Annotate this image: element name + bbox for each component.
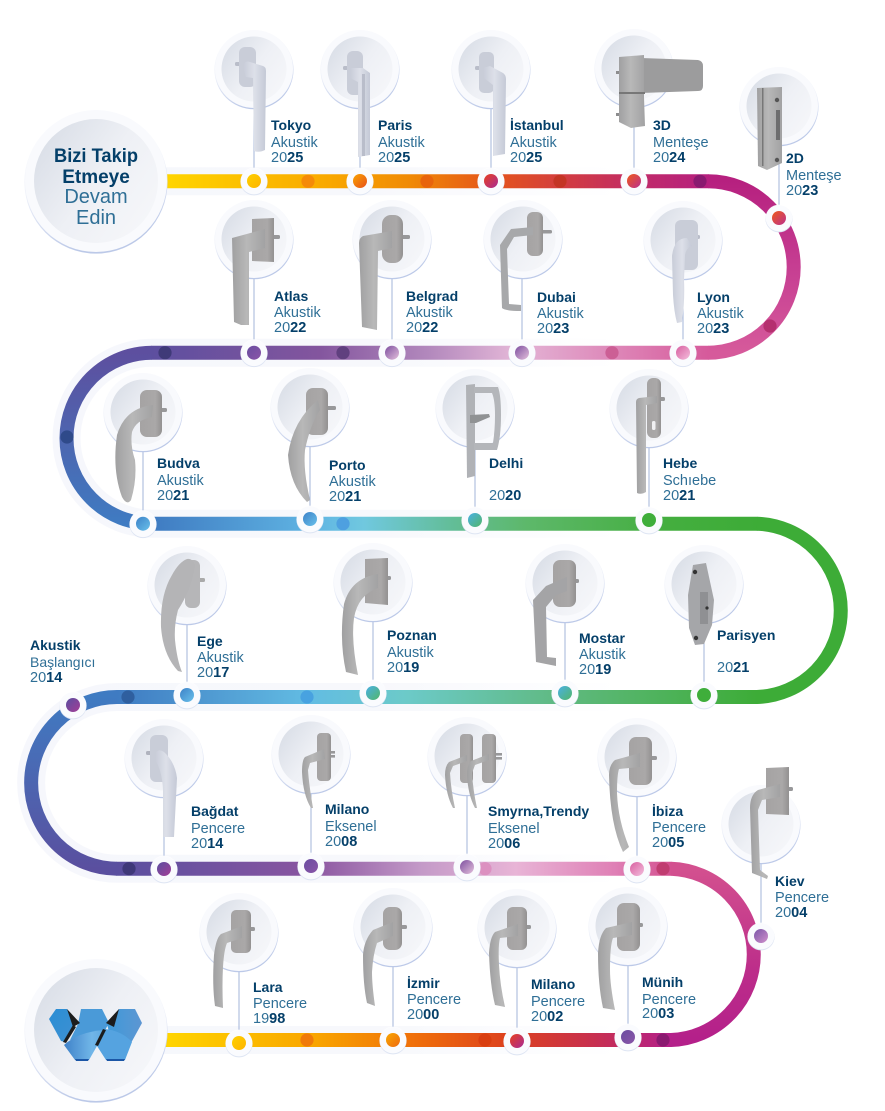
icon: Bağdat handle [146,735,177,837]
timeline track [31,181,841,1040]
label: Smyrna, Trendy: Smyrna,Trendy [488,803,589,819]
label: Poznan: Akustik [387,645,434,661]
label: Tokyo: Akustik [271,135,318,151]
label: Akustik Başlangıcı: 2014 [30,670,62,686]
icon: Budva handle [115,390,167,502]
label: Ege [197,633,244,681]
label: Paris: 2025 [378,150,410,166]
label: Porto: 2021 [329,489,361,505]
icon: Lyon handle [672,220,700,323]
icon: Ege handle [161,559,205,672]
label: Akustik Başlangıcı: Başlangıcı [30,654,95,670]
label: İbiza: Pencere [652,820,706,836]
product: Mostar [525,544,626,707]
label: Parisyen: Parisyen [717,627,775,643]
label: Lara [253,979,307,1027]
product: Kiev [721,767,829,950]
label: 3D: Menteşe [653,135,709,151]
label: Lyon: 2023 [697,321,729,337]
label: Parisyen: 2021 [717,660,749,676]
label: 3D: 3D [653,117,671,133]
label: 2D: 2D [786,150,804,166]
label: Delhi: Delhi [489,455,523,471]
icon: 3D hinge [616,55,703,128]
label: İstanbul [510,117,564,166]
label: Parisyen [717,627,775,676]
label: İstanbul: İstanbul [510,117,564,133]
label: 2D: 2023 [786,183,818,199]
label: Lara: Pencere [253,996,307,1012]
icon: İstanbul handle [475,52,506,156]
product: Hebe [609,369,716,534]
label: Poznan: Poznan [387,627,437,643]
product: Delhi [435,369,523,534]
label: Belgrad [406,288,458,336]
product: 3D [594,29,709,195]
label: Lyon [697,289,744,337]
label: İzmir [407,975,461,1023]
start badge: Bizi Takip Etmeye Devam Edin: Etmeye [62,167,130,188]
product: Münih [588,887,696,1051]
label: İbiza: İbiza [652,803,683,819]
label: Paris: Paris [378,117,412,133]
label: Akustik Başlangıcı: Akustik [30,637,81,653]
label: Milano Pencere: Pencere [531,994,585,1010]
label: Belgrad: 2022 [406,320,438,336]
label: Kiev: Kiev [775,873,805,889]
label: Atlas [274,288,321,336]
start badge: Bizi Takip Etmeye Devam Edin: Devam [64,186,128,208]
product: Tokyo [214,30,318,195]
label: İstanbul: 2025 [510,150,542,166]
logo badge [24,959,168,1103]
label: Kiev: Pencere [775,890,829,906]
start badge: Bizi Takip Etmeye Devam Edin [24,110,168,254]
label: Milano Eksenel [325,801,377,850]
label: Budva: Akustik [157,473,204,489]
label: Dubai: Akustik [537,306,584,322]
product: Lara [199,893,307,1057]
label: Münih: Münih [642,974,683,990]
label: Lyon: Lyon [697,289,730,305]
label: Ege: Akustik [197,650,244,666]
label: Bağdat: Bağdat [191,803,239,819]
label: Hebe: Hebe [663,455,697,471]
label: Tokyo: Tokyo [271,117,311,133]
icon: company logo [49,1009,142,1061]
product: Smyrna, Trendy [427,717,589,881]
label: Belgrad: Belgrad [406,288,458,304]
label: Porto: Akustik [329,474,376,490]
icon: Mostar handle [533,560,579,666]
label: Münih: 2003 [642,1006,674,1022]
label: Bağdat: Pencere [191,821,245,837]
label: Milano Eksenel: Milano [325,801,369,817]
label: Lara: 1998 [253,1011,285,1027]
icon: İbiza handle [609,737,657,852]
icon: Parisyen hardware [688,563,714,645]
label: Mostar: 2019 [579,662,611,678]
product: Lyon [643,201,744,367]
icon: Milano Eksenel handle [302,733,335,808]
product: Parisyen [664,545,775,709]
label: 2D: Menteşe [786,168,842,184]
label: İzmir: Pencere [407,992,461,1008]
product: Dubai [483,200,584,367]
label: Smyrna, Trendy [488,803,589,852]
label: Hebe: 2021 [663,488,695,504]
label: Mostar: Akustik [579,647,626,663]
label: Atlas: 2022 [274,320,306,336]
label: Atlas: Akustik [274,305,321,321]
icon: Dubai handle [500,212,552,311]
icon: İzmir handle [363,907,407,1006]
product: Budva [103,373,204,538]
label: 2D [786,150,842,199]
label: Bağdat: 2014 [191,836,223,852]
label: Dubai [537,289,584,337]
label: Tokyo: 2025 [271,150,303,166]
product: Poznan [333,543,437,707]
icon: Paris handle [343,51,370,157]
icon: Smyrna and Trendy handles [445,734,502,808]
label: Dubai: 2023 [537,321,569,337]
label: Bağdat [191,803,245,852]
label: Hebe: Schıebe [663,473,716,489]
label: Milano Eksenel: Eksenel [325,819,377,835]
label: Münih [642,974,696,1022]
label: Kiev [775,873,829,921]
label: Ege: Ege [197,633,223,649]
product: Belgrad [352,200,458,367]
icon: Porto handle [288,388,336,502]
label: 3D [653,117,709,166]
label: Ege: 2017 [197,665,229,681]
label: Atlas: Atlas [274,288,308,304]
label: Poznan [387,627,437,676]
label: 3D: 2024 [653,150,685,166]
label: Paris: Akustik [378,135,425,151]
product: Porto [270,368,376,533]
label: Tokyo [271,117,318,166]
product: Bağdat [124,719,245,883]
track accent dots [60,175,777,1047]
label: Budva: 2021 [157,488,189,504]
label: Poznan: 2019 [387,660,419,676]
product: Milano Pencere [477,889,585,1055]
icon: Kiev handle [750,767,793,879]
product: İbiza [597,718,706,883]
label: Porto [329,457,376,505]
label: Milano Pencere: Milano [531,976,575,992]
product: Paris [320,30,425,195]
label: Milano Eksenel: 2008 [325,834,357,850]
icon: Tokyo handle [235,47,266,152]
icon: Münih handle [598,903,643,1010]
label: Smyrna, Trendy: Eksenel [488,821,540,837]
label: Porto: Porto [329,457,366,473]
label: Akustik Başlangıcı [30,637,95,686]
label: İbiza [652,803,706,851]
label: İzmir: 2000 [407,1007,439,1023]
label: Mostar [579,630,626,678]
label: Hebe [663,455,716,504]
label: Kiev: 2004 [775,905,807,921]
product: İstanbul [451,30,564,195]
label: Mostar: Mostar [579,630,625,646]
icon: Milano Pencere handle [489,907,531,1007]
icon: Lara handle [213,910,255,1008]
product: İzmir [353,888,461,1054]
label: Milano Pencere: 2002 [531,1009,563,1025]
label: Dubai: Dubai [537,289,576,305]
label: İstanbul: Akustik [510,135,557,151]
start badge: Bizi Takip Etmeye Devam Edin: Bizi Takip [54,146,138,167]
icon: 2D hinge [757,87,782,170]
label: Budva [157,455,204,504]
icon: Hebe handle [636,378,665,494]
label: Milano Pencere [531,976,585,1025]
product: Milano Eksenel [271,715,377,880]
product: Ege [147,546,244,709]
label: Paris [378,117,425,166]
start badge: Bizi Takip Etmeye Devam Edin: Edin [76,207,116,229]
label: Münih: Pencere [642,992,696,1008]
product: 2D [739,67,842,232]
label: Smyrna, Trendy: 2006 [488,836,520,852]
product: Atlas [214,200,321,367]
label: Lara: Lara [253,979,283,995]
icon: Poznan handle [342,558,391,675]
label: Belgrad: Akustik [406,305,453,321]
icon: Belgrad handle [359,215,410,330]
icon: Atlas handle [232,218,280,325]
label: İzmir: İzmir [407,975,440,991]
icon: Delhi handle [466,384,501,478]
label: Delhi: 2020 [489,488,521,504]
label: İbiza: 2005 [652,835,684,851]
label: Delhi [489,455,523,504]
product: Akustik Başlangıcı [30,637,95,719]
label: Lyon: Akustik [697,306,744,322]
label: Budva: Budva [157,455,200,471]
